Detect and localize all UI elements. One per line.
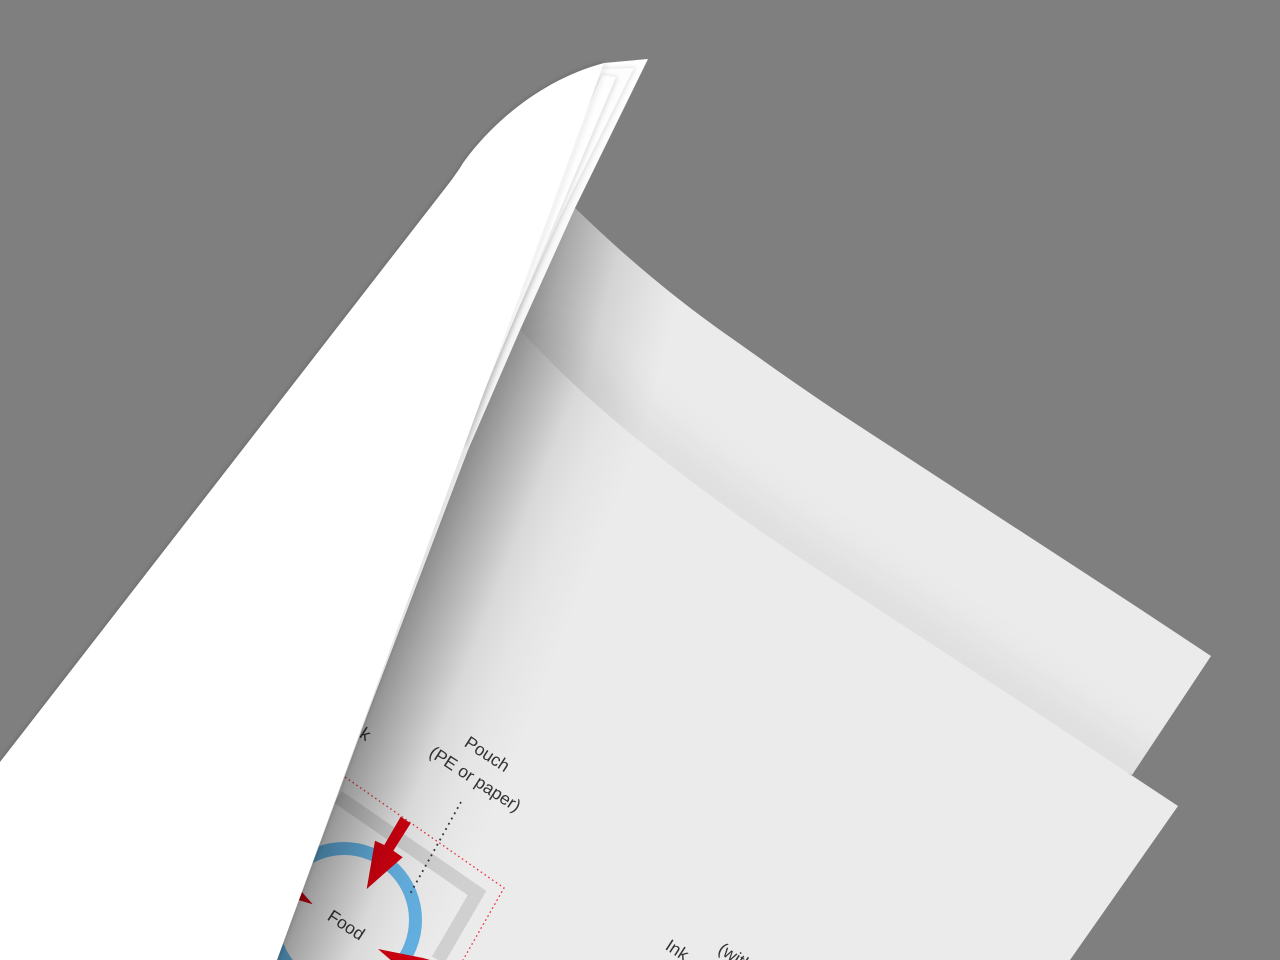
panel: front page: [272, 330, 1178, 960]
outer sheet: [277, 59, 648, 960]
label: Pouch: Pouch: [461, 732, 514, 776]
red dotted boundary: [345, 777, 504, 960]
pouch diagram: [272, 715, 757, 960]
red arrow: bottom: [378, 949, 430, 960]
label: PE or paper: (PE or paper): [426, 742, 525, 816]
spine shadow: [277, 330, 1178, 960]
dotted leader: [410, 802, 461, 894]
second sheet: [466, 74, 618, 442]
shadow of main sheet: [329, 64, 606, 818]
panel: turned white page: [0, 63, 604, 960]
panel: page stack at the tip: [277, 59, 648, 960]
red arrow: top: [367, 817, 411, 889]
panel: back page: [520, 208, 1211, 775]
red arrow: left: [299, 892, 313, 904]
third sheet: [465, 66, 636, 446]
panel: turned page shadow: [0, 63, 604, 960]
grey pouch frame: [338, 797, 477, 960]
label: Food: Food: [324, 906, 368, 944]
blue circle: [272, 848, 416, 960]
label: Ink upper: Ink: [344, 715, 375, 745]
